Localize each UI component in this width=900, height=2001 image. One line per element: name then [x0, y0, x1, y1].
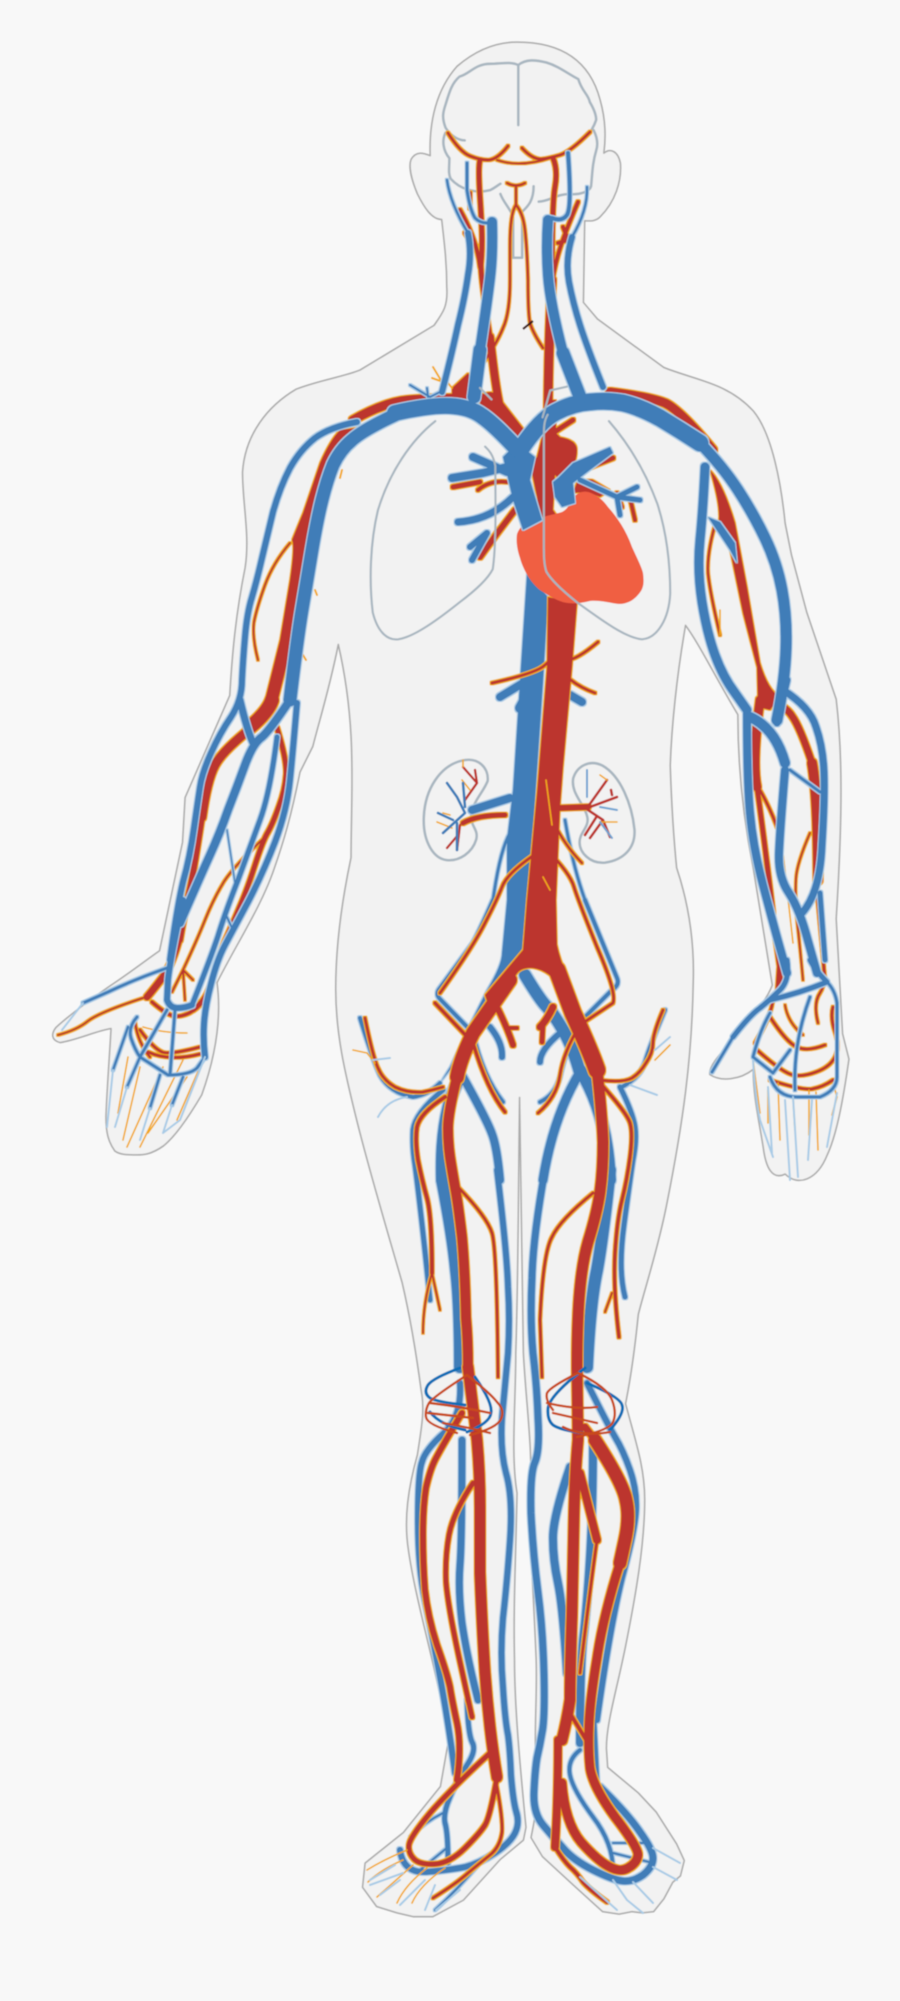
internal iliac arteries [497, 1007, 513, 1045]
left pulmonary veins [452, 457, 507, 478]
gonadal artery [542, 778, 582, 863]
lung apex arcs [480, 387, 567, 417]
kidney branches [437, 760, 617, 850]
left arm side branch [254, 543, 290, 660]
renal arteries [463, 815, 505, 823]
left kidney veins [438, 783, 465, 850]
right foot pale [580, 1848, 680, 1913]
calf arteries right [562, 1367, 578, 1740]
right arm orange [720, 610, 793, 943]
right carotid [552, 158, 556, 280]
right hand arteries [778, 960, 780, 990]
pulmonary arteries left [453, 482, 480, 487]
descending aorta [485, 597, 577, 1010]
left fingers orange [118, 1057, 203, 1147]
pulmonary arteries right [590, 458, 613, 467]
right kidney veins [587, 770, 617, 838]
great veins and arm veins [83, 153, 837, 1108]
left knee red fan [426, 1375, 502, 1435]
right fingers orange [753, 1060, 837, 1150]
lateral thigh arteries [416, 1097, 445, 1273]
gluteal veins [360, 1018, 440, 1097]
right knee blue ring [548, 1368, 622, 1433]
left foot red link [467, 1700, 473, 1717]
external iliac loops [438, 900, 503, 1102]
right arm inner vein [699, 467, 747, 710]
left wrist arcs [152, 998, 207, 1016]
knee veins below [418, 1383, 460, 1773]
abdominal artery crossing [492, 642, 598, 683]
left forearm veins [180, 700, 290, 923]
heart [517, 492, 644, 604]
left subclavian vein [395, 406, 518, 450]
kidney right [573, 763, 635, 863]
brain midline [517, 65, 519, 125]
vertebral arteries [483, 183, 525, 363]
right neck veins [552, 153, 570, 219]
medial thigh arteries [458, 1187, 498, 1377]
right iliac vein [525, 975, 580, 1073]
left wrist veins [167, 900, 192, 1008]
toes left orange [367, 1850, 445, 1903]
right arm wedge [708, 517, 737, 563]
inferior vena cava [440, 573, 548, 1083]
left kidney arteries [447, 767, 477, 850]
right kidney orange [600, 775, 617, 822]
right foot artery [555, 1847, 607, 1902]
left knee blue ring [426, 1368, 491, 1432]
left upper arm artery [265, 427, 363, 700]
shoulder twigs [303, 367, 452, 660]
cerebellum and brainstem [443, 130, 597, 258]
calf arteries left [468, 1367, 497, 1777]
external carotid branches [460, 193, 480, 267]
left kidney orange [437, 760, 470, 828]
brain [443, 60, 596, 140]
cerebral arteries [448, 132, 590, 160]
right subclavian vein [520, 401, 700, 450]
calf veins [459, 1440, 478, 1700]
left foot pale [370, 1865, 460, 1910]
left foot arteries [409, 1753, 497, 1864]
fine orange branches [118, 367, 837, 1903]
femoral veins upper [463, 1077, 500, 1180]
right lung [544, 415, 670, 639]
knee arteries and veins [426, 1368, 622, 1437]
foot veins [410, 1813, 653, 1870]
left arm thin vein [170, 422, 357, 960]
left shoulder artery block [452, 373, 485, 410]
renal veins [472, 798, 510, 810]
right finger veins pale [753, 1060, 837, 1180]
head organs [424, 60, 635, 863]
abdominal vein stubs [500, 683, 582, 702]
right hand veins [733, 960, 788, 1037]
brachiocephalic trunk [490, 402, 518, 438]
gluteal pale [373, 1037, 670, 1117]
gonadal twins [543, 780, 552, 890]
lung outlines [371, 387, 670, 639]
aortic arch branch [553, 420, 573, 433]
internal iliac veins [490, 1027, 560, 1062]
right kidney arteries [585, 780, 617, 838]
gluteal arteries [365, 1018, 443, 1092]
arteries layer [58, 132, 838, 1902]
right forearm veins [747, 713, 787, 973]
right knee red fan [547, 1373, 615, 1437]
deep veins layer [360, 573, 665, 1910]
left lung [371, 421, 496, 639]
pale distal veins [62, 1003, 837, 1913]
small black mark [523, 321, 533, 329]
right arm main vein [700, 443, 786, 720]
superior vena cava [503, 443, 542, 530]
right upper arm artery [710, 470, 780, 710]
right iliac and femoral [557, 970, 597, 1070]
left arm thick vein [290, 415, 395, 700]
lateral thigh veins [413, 1090, 443, 1300]
left neck veins [467, 163, 487, 223]
external iliac arteries [440, 853, 537, 993]
subclavian arteries [353, 398, 482, 420]
shoulder twigs blue [410, 385, 440, 397]
right forearm arteries [755, 700, 760, 787]
gluteal twigs [353, 1045, 670, 1063]
aortic arch [532, 400, 577, 520]
left iliac and femoral [457, 980, 510, 1077]
left carotid [479, 160, 490, 337]
kidney left [424, 760, 488, 860]
left forearm twigs [143, 1027, 187, 1033]
right pulmonary vein group [553, 447, 613, 507]
thigh veins [442, 1180, 460, 1367]
left finger veins pale [62, 1003, 205, 1140]
left forearm artery [250, 700, 272, 727]
